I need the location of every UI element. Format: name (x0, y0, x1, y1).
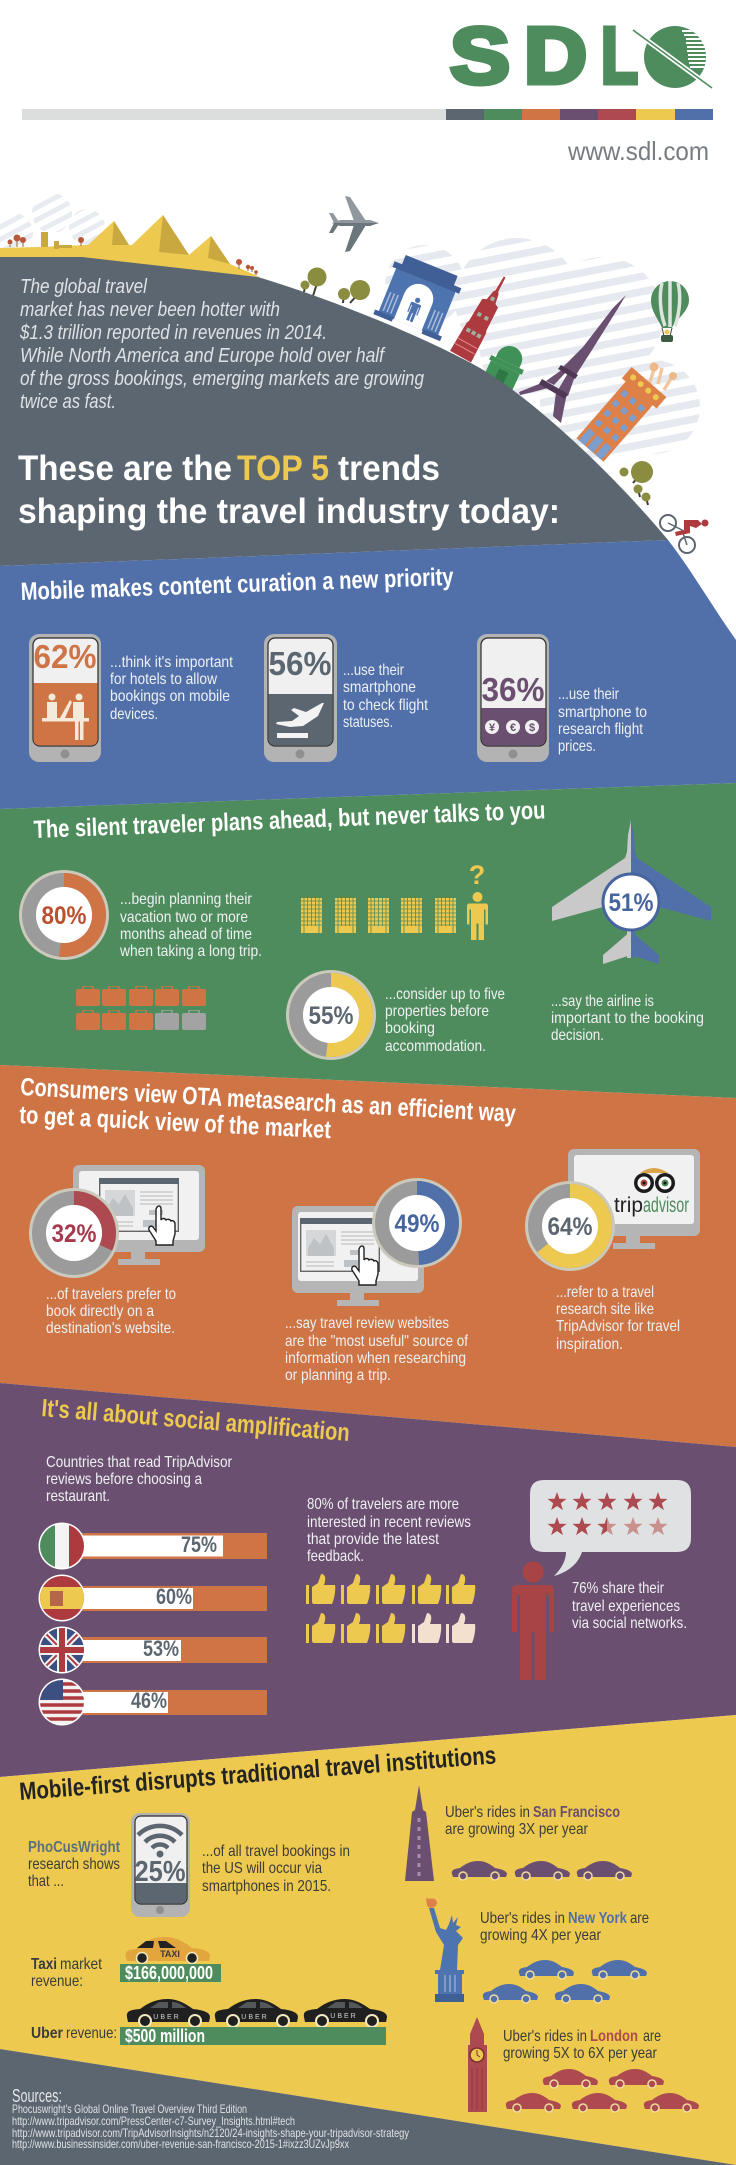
text: New York (480, 1910, 649, 1944)
text: airline importance: important to the booking (551, 1010, 704, 1027)
text: smartphone bookings: smartphones in 2015. (202, 1878, 331, 1895)
text: destination website: destination's website. (46, 1320, 175, 1337)
text: five properties: ...consider up to five (385, 986, 505, 1003)
icon: person with question mark (467, 860, 488, 940)
bar: uber revenue (120, 2026, 386, 2046)
phone: 62%: 62% (34, 638, 96, 675)
text: flight status: ...use their (343, 662, 405, 679)
text: five properties: booking (385, 1020, 435, 1037)
icon: currency coins: $ (529, 722, 535, 734)
icon: green dome (479, 340, 531, 396)
main heading: TOP 5 (237, 449, 329, 488)
text: PhoCusWright (28, 1839, 121, 1890)
speech bubble with stars (530, 1480, 691, 1576)
monitor with 49% donut: 49% (394, 1210, 440, 1238)
text: San Francisco: are growing 3X per year (445, 1821, 589, 1838)
panel: dark slate hill (0, 257, 668, 566)
icon: tripadvisor owl (634, 1168, 675, 1193)
text: five properties (385, 986, 505, 1055)
monitor with TripAdvisor and 64% donut: 64% (548, 1213, 592, 1241)
icon: pyramids and sand (0, 215, 260, 277)
icon: currency coins (485, 720, 539, 734)
text: New York: Uber's rides in (480, 1910, 565, 1927)
icon: cyclist (660, 515, 708, 553)
text: recent reviews (307, 1496, 471, 1565)
text: taxi market revenue (31, 1956, 102, 1990)
icon: hot air balloon (651, 281, 689, 342)
text: PhoCusWright: PhoCusWright (28, 1839, 121, 1856)
text: five properties: accommodation. (385, 1038, 486, 1055)
text: London (503, 2028, 661, 2062)
text: San Francisco (445, 1804, 620, 1838)
striped clouds (0, 193, 700, 460)
text: recent reviews: that provide the latest (307, 1531, 439, 1548)
text: uber revenue: Uber (31, 2025, 63, 2042)
text: destination website (46, 1286, 176, 1337)
icon: hotel reception (42, 694, 89, 740)
text: TripAdvisor inspiration: TripAdvisor for travel (556, 1318, 680, 1335)
text: flight prices: prices. (558, 738, 596, 755)
intro text: The global travel (20, 276, 147, 298)
text: recent reviews: interested in recent reviews (307, 1514, 471, 1531)
text: London: Uber's rides in (503, 2028, 587, 2045)
icon: hotels (301, 896, 456, 933)
text: flight status: to check flight (343, 697, 428, 714)
text: TripAdvisor inspiration: ...refer to a travel (556, 1284, 654, 1301)
text: vacation planning: months ahead of time (120, 926, 252, 943)
text: flight prices: research flight (558, 721, 643, 738)
text: countries: restaurant. (46, 1488, 110, 1505)
bar: Spain 60%: 60% (156, 1584, 192, 1609)
icon: suitcases (76, 986, 206, 1030)
tripadvisor wordmark: advisor (643, 1194, 689, 1217)
text: TripAdvisor inspiration (556, 1284, 680, 1353)
icon: Big Ben (468, 2017, 487, 2112)
text: uber revenue (31, 2025, 117, 2042)
heading: Mobile makes content curation a new priority (20, 563, 454, 606)
bar: UK 53% (38, 1626, 267, 1674)
text: share experiences: via social networks. (572, 1615, 687, 1632)
main heading (18, 449, 560, 531)
phone: 36% (477, 634, 549, 762)
panel: social amplification (0, 1383, 736, 1777)
text: vacation planning: vacation two or more (120, 909, 248, 926)
icon: airplane (329, 196, 379, 252)
heading: Mobile-first disrupts traditional travel institutions (18, 1741, 497, 1806)
panel: mobile content curation (0, 540, 736, 809)
text: taxi market revenue: revenue: (31, 1973, 83, 1990)
text: TripAdvisor inspiration: inspiration. (556, 1336, 623, 1353)
text: smartphone bookings (202, 1843, 350, 1895)
icon: plane taking off (276, 703, 324, 738)
donut: 55%: 55% (308, 1002, 354, 1030)
icon: taxi car (125, 1937, 210, 1964)
bar: UK 53%: 53% (143, 1636, 179, 1661)
phone: 25% (131, 1813, 190, 1917)
bar: Spain 60% (38, 1574, 267, 1622)
text: airline importance: ...say the airline is (551, 993, 654, 1010)
text: PhoCusWright: that ... (28, 1873, 64, 1890)
icon: taxi car: TAXI (160, 1949, 180, 1959)
icon: uber cars (127, 1999, 387, 2027)
text: flight status: statuses. (343, 714, 393, 731)
heading: to get a quick view of the market (19, 1101, 332, 1144)
bar: USA 46% (38, 1678, 267, 1726)
icon: wifi (138, 1826, 182, 1856)
text: taxi market revenue: Taxi (31, 1956, 57, 1973)
text: review websites: are the "most useful" source of (285, 1333, 468, 1350)
donut: 55% (286, 970, 376, 1060)
icon: Transamerica pyramid (405, 1785, 434, 1881)
intro text (19, 276, 424, 413)
source list: http://www.tripadvisor.com/PressCenter-c7-Survey_Insights.html#tech (12, 2114, 295, 2128)
text: flight status (343, 662, 428, 731)
text: London: growing 5X to 6X per year (503, 2045, 658, 2062)
text: five properties: properties before (385, 1003, 489, 1020)
tripadvisor wordmark: trip (614, 1194, 643, 1217)
text: New York: New York (568, 1910, 627, 1927)
icon: airplane 51%: 51% (608, 889, 654, 917)
logo: SDL: D (524, 11, 587, 100)
text: hotels (110, 654, 233, 723)
icon: person with question mark: ? (469, 860, 485, 890)
icon: Eiffel tower (519, 295, 626, 423)
monitor with TripAdvisor and 64% donut (525, 1149, 700, 1271)
monitor with 32% donut (29, 1165, 205, 1278)
intro text: twice as fast. (20, 391, 116, 413)
icon: purple cars (452, 1861, 632, 1880)
main heading: These are the (18, 449, 232, 488)
bar: uber revenue: $500 million (125, 2026, 205, 2046)
text: countries: reviews before choosing a (46, 1471, 202, 1488)
text: hotels: devices. (110, 706, 158, 723)
text: airline importance (551, 993, 704, 1044)
logo: SDL: L (601, 11, 638, 100)
text: share experiences: travel experiences (572, 1598, 680, 1615)
text: flight status: smartphone (343, 679, 416, 696)
text: New York: are (630, 1910, 649, 1927)
intro text: While North America and Europe hold over half (20, 345, 386, 367)
heading: The silent traveler plans ahead, but never talks to you (33, 796, 546, 844)
donut: 80% (19, 870, 109, 960)
icon: person sharing (512, 1562, 554, 1680)
intro text: market has never been hotter with (20, 299, 280, 321)
bar: Italy 75%: 75% (181, 1532, 217, 1557)
text: destination website: book directly on a (46, 1303, 154, 1320)
phone: 56% (264, 634, 337, 762)
bar: USA 46%: 46% (131, 1688, 167, 1713)
icon: blue cars (483, 1960, 647, 2003)
text: flight prices (558, 686, 647, 755)
text: vacation planning: ...begin planning their (120, 891, 253, 908)
text: flight prices: smartphone to (558, 704, 647, 721)
text: countries (46, 1454, 233, 1505)
text: countries: Countries that read TripAdvisor (46, 1454, 233, 1471)
text: smartphone bookings: ...of all travel bookings in (202, 1843, 350, 1860)
source list: Phocuswright's Global Online Travel Overview Third Edition (12, 2102, 247, 2116)
text: hotels: ...think it's important (110, 654, 233, 671)
heading: It's all about social amplification (41, 1394, 351, 1447)
text: recent reviews: 80% of travelers are more (307, 1496, 459, 1513)
icon: currency coins: € (510, 722, 516, 734)
monitor with 32% donut: 32% (52, 1220, 96, 1248)
text: PhoCusWright: research shows (28, 1856, 120, 1873)
text: San Francisco: Uber's rides in (445, 1804, 530, 1821)
bar: taxi revenue: $166,000,000 (125, 1963, 213, 1983)
icon: uber cars: UBER (153, 2014, 181, 2021)
panel: mobile-first disrupts (0, 1715, 736, 2165)
text: share experiences (572, 1580, 687, 1632)
text: taxi market revenue: market (60, 1956, 102, 1973)
text: review websites: ...say travel review websites (285, 1315, 449, 1332)
icon: blue arch (373, 252, 465, 341)
text: share experiences: 76% share their (572, 1580, 665, 1597)
icon: uber cars: UBER (330, 2013, 358, 2020)
text: flight prices: ...use their (558, 686, 620, 703)
text: New York: growing 4X per year (480, 1927, 602, 1944)
text: TripAdvisor inspiration: research site like (556, 1301, 654, 1318)
text: San Francisco: San Francisco (533, 1804, 620, 1821)
phone: 62% (29, 634, 101, 762)
main heading: shaping the travel industry today: (18, 492, 560, 531)
icon: uber cars: UBER (241, 2014, 269, 2021)
logo: SDL: S (450, 11, 510, 100)
text: uber revenue: revenue: (66, 2025, 117, 2042)
text: review websites: information when researching (285, 1350, 466, 1367)
source list: http://www.tripadvisor.com/TripAdvisorInsights/n2120/24-insights-shape-your-tripadvisor-strategy (12, 2126, 409, 2140)
website url: www.sdl.com (567, 136, 709, 166)
phone: 56%: 56% (268, 645, 332, 682)
donut: 80%: 80% (42, 902, 86, 930)
logo: SDL (449, 25, 712, 88)
text: London: are (643, 2028, 661, 2045)
text: London: London (590, 2028, 638, 2045)
panel: sources (0, 2049, 736, 2165)
main heading: trends (338, 449, 440, 488)
text: review websites (285, 1315, 468, 1384)
text: vacation planning (119, 891, 262, 960)
heading: Consumers view OTA metasearch as an efficient way (20, 1073, 517, 1128)
icon: red tower (450, 271, 515, 362)
icon: currency coins: ¥ (489, 722, 496, 734)
heading: Sources: (12, 2086, 62, 2106)
icon: airplane 51% (552, 820, 711, 964)
text: destination website: ...of travelers prefer to (46, 1286, 176, 1303)
icon: hotel with cutlery (573, 362, 677, 465)
text: hotels: for hotels to allow (110, 671, 217, 688)
monitor with 49% donut (292, 1178, 462, 1306)
icon: trees (300, 268, 653, 505)
text: recent reviews: feedback. (307, 1548, 364, 1565)
intro text: of the gross bookings, emerging markets are growing (20, 368, 424, 390)
icon: thumbs up grid (306, 1574, 475, 1643)
phone: 36%: 36% (482, 671, 544, 708)
panel: silent traveler (0, 783, 736, 1098)
text: vacation planning: when taking a long trip. (119, 943, 262, 960)
source list (12, 2102, 409, 2151)
bar: Italy 75% (38, 1522, 267, 1570)
phone: 25%: 25% (134, 1856, 186, 1888)
icon: red cars (506, 2069, 699, 2112)
tripadvisor wordmark (614, 1194, 689, 1217)
text: smartphone bookings: the US will occur via (202, 1860, 322, 1877)
text: airline importance: decision. (551, 1027, 604, 1044)
icon: Statue of Liberty (426, 1898, 464, 2002)
colour bar (22, 109, 713, 120)
source list: http://www.businessinsider.com/uber-revenue-san-francisco-2015-1#ixzz3UZvJp9xx (12, 2137, 349, 2151)
text: hotels: bookings on mobile (110, 688, 230, 705)
text: review websites: or planning a trip. (285, 1367, 391, 1384)
intro text: $1.3 trillion reported in revenues in 2014. (19, 322, 327, 344)
panel: OTA metasearch (0, 1065, 736, 1447)
